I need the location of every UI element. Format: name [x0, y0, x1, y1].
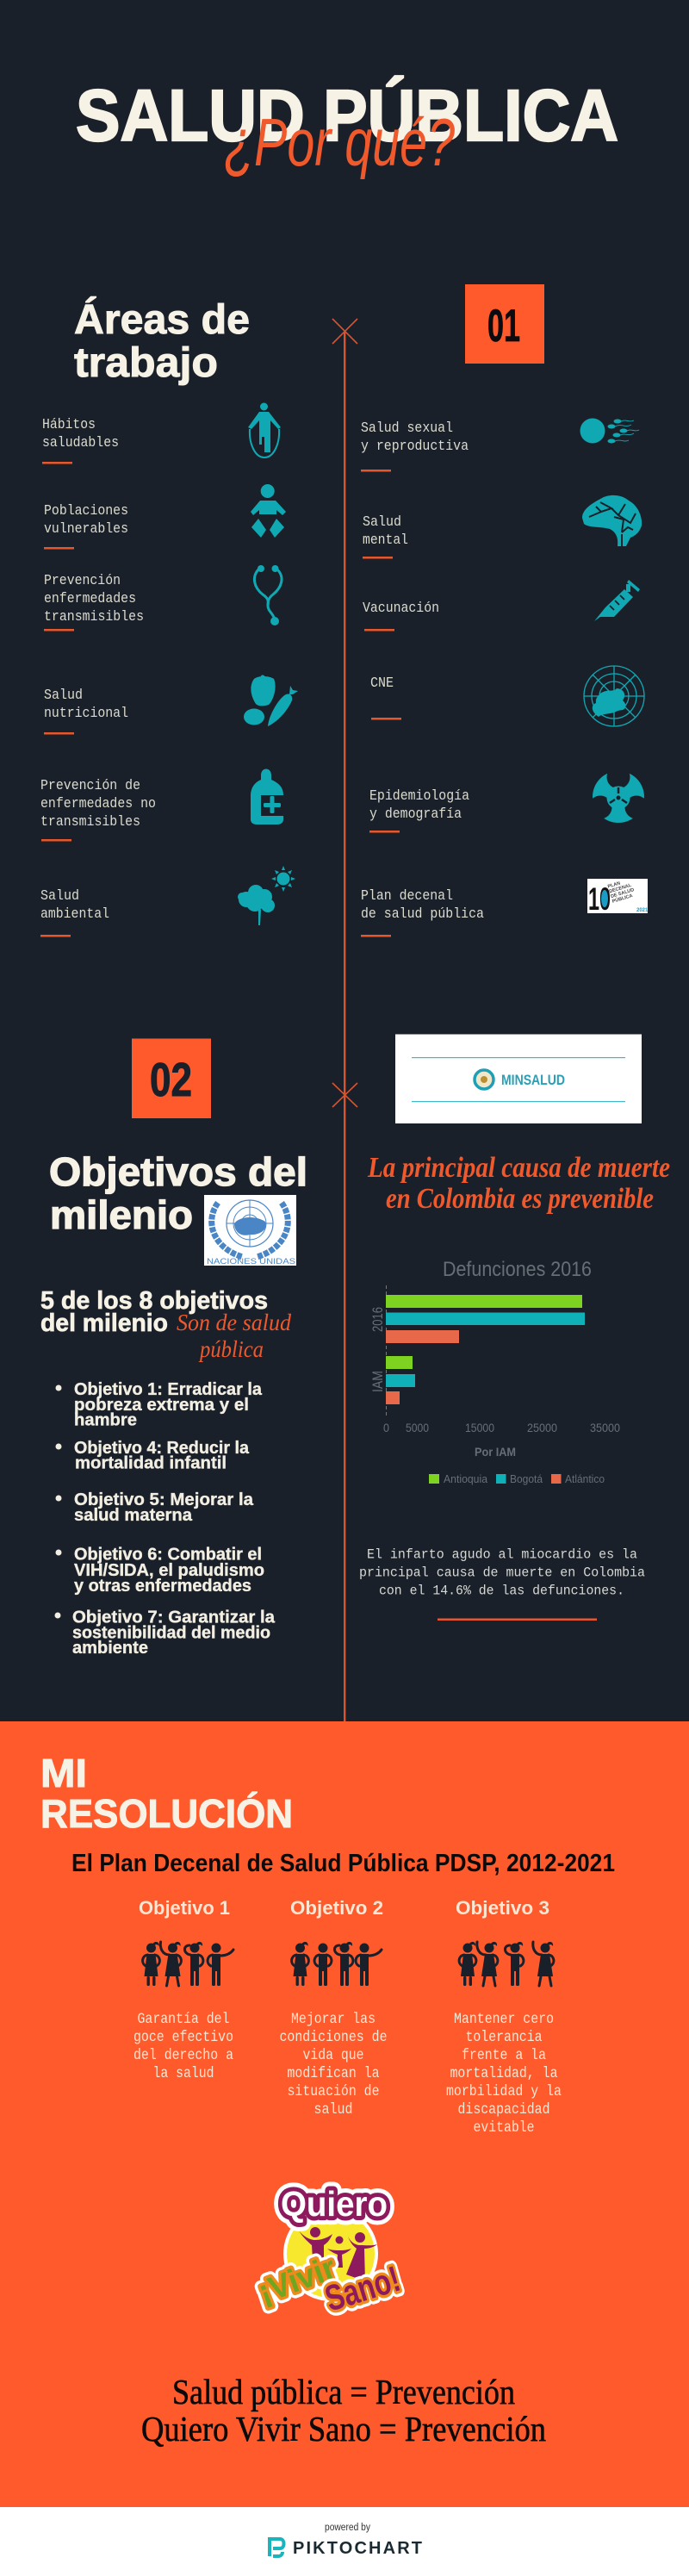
logo: quiero vivir sano: ¡Vivir [254, 2249, 341, 2311]
logo: quiero vivir sano: Quiero [281, 2184, 388, 2224]
column: objetivo 2: modifican la [288, 2065, 379, 2082]
logo: quiero vivir sano: ¡Vivir [254, 2249, 341, 2311]
item: enfermedades transmisibles: transmisibles [44, 608, 144, 625]
item: poblaciones vulnerables: Poblaciones [44, 502, 128, 519]
column: objetivo 1: Garantía del [138, 2011, 229, 2028]
item: enfermedades transmisibles: Prevención [44, 572, 121, 588]
objective 6 [55, 1546, 264, 1596]
icon: baby [251, 484, 286, 538]
item: epidemiologia [369, 787, 469, 832]
legend: Antioquia [444, 1472, 488, 1485]
objective 6: y otras enfermedades [74, 1577, 251, 1596]
x axis title: Por IAM [475, 1445, 516, 1459]
script note: son de salud publica [177, 1310, 291, 1362]
heading: areas de trabajo: Áreas de [74, 296, 250, 343]
text block: infarto agudo [359, 1547, 645, 1599]
column: objetivo 1: goce efectivo [133, 2029, 233, 2046]
subtitle: ¿Por qué? [224, 104, 455, 180]
text block: infarto agudo: con el 14.6% de las defunciones. [379, 1584, 624, 1599]
heading: mi resolucion [40, 1751, 293, 1836]
subheading: 5 de los 8 objetivos: del milenio [40, 1310, 168, 1337]
list: left column areas [40, 416, 156, 937]
objective 1: Objetivo 1: Erradicar la [74, 1380, 263, 1399]
column: objetivo 3: Objetivo 3 [456, 1897, 549, 1919]
heading: objetivos del milenio: Objetivos del [49, 1149, 307, 1194]
item: salud sexual [361, 420, 469, 472]
x axis labels: 35000 [590, 1421, 620, 1434]
logo: quiero vivir sano: Sano! [320, 2258, 405, 2319]
item: salud mental: Salud [363, 513, 401, 530]
objective 4: mortalidad infantil [75, 1454, 227, 1473]
item: enfermedades no transmisibles: enfermedades no [40, 795, 156, 812]
objective 5: salud materna [74, 1506, 193, 1525]
chart title: Defunciones 2016 [443, 1258, 592, 1281]
icon: medicine bottle [251, 768, 283, 824]
item: epidemiologia: y demografía [369, 806, 462, 822]
bars [386, 1295, 585, 1404]
column: objetivo 3 [446, 1897, 562, 2137]
item: enfermedades no transmisibles [40, 777, 156, 841]
legend: Atlántico [565, 1472, 605, 1485]
item: plan decenal [361, 887, 484, 937]
objective 5: Objetivo 5: Mejorar la [74, 1490, 254, 1509]
item: salud mental: mental [363, 532, 408, 548]
legend: Bogotá [510, 1472, 543, 1485]
item: poblaciones vulnerables: vulnerables [44, 520, 128, 537]
item: salud mental [363, 513, 408, 558]
item: salud nutricional: nutricional [44, 705, 128, 721]
y axis labels: 2016 [369, 1307, 386, 1332]
objective 4 [55, 1439, 250, 1473]
item: salud sexual: Salud sexual [361, 420, 453, 436]
item: CNE: CNE [370, 675, 394, 691]
objective 1 [55, 1380, 263, 1430]
objective 1: pobreza extrema y el [74, 1396, 249, 1415]
item: salud sexual: y reproductiva [361, 438, 469, 454]
x axis labels: 25000 [527, 1421, 557, 1434]
icon: egg and sperm [580, 419, 639, 443]
item: epidemiologia: Epidemiología [369, 787, 469, 804]
item: CNE [370, 675, 401, 720]
column: objetivo 2: salud [313, 2101, 353, 2119]
objective 5 [55, 1490, 254, 1525]
icon: tree and sun [238, 866, 295, 925]
logo: quiero vivir sano: Sano! [320, 2258, 405, 2319]
objective 7: sostenibilidad del medio [72, 1623, 270, 1642]
item: habitos saludables: Hábitos [42, 416, 96, 432]
x axis labels [383, 1421, 620, 1434]
logo: quiero vivir sano: Quiero [281, 2184, 388, 2224]
bar chart: defunciones 2016 [369, 1258, 620, 1485]
logo: quiero vivir sano: ¡Vivir [254, 2249, 341, 2311]
badge 02: 02 [150, 1053, 192, 1106]
logo: quiero vivir sano: Sano! [320, 2258, 405, 2319]
logo: naciones unidas: NACIONES UNIDAS [207, 1257, 295, 1266]
logo: plan decenal: DECENAL [609, 883, 632, 894]
logo: plan decenal: DE SALUD [610, 887, 635, 899]
column: objetivo 2: Objetivo 2 [290, 1897, 383, 1919]
objective 7: ambiente [72, 1639, 148, 1658]
item: enfermedades no transmisibles: Prevención de [40, 777, 140, 793]
logo: quiero vivir sano: Quiero [281, 2184, 388, 2224]
central timeline line [332, 319, 357, 1721]
heading: areas de trabajo: trabajo [74, 340, 218, 386]
icon: vegetables [244, 675, 298, 726]
logo: plan decenal: 2021 [636, 908, 649, 913]
chart axis [386, 1285, 388, 1417]
background: dark section [0, 0, 689, 1721]
column: objetivo 3: frente a la [462, 2047, 546, 2064]
text block: infarto agudo: principal causa de muerte en Colombia [359, 1565, 645, 1580]
legend [429, 1472, 605, 1485]
footer: piktochart: PIKTOCHART [293, 2539, 422, 2558]
logo: naciones unidas [204, 1195, 296, 1266]
subheading: 5 de los 8 objetivos [40, 1287, 268, 1337]
x axis labels: 15000 [465, 1421, 494, 1434]
closing statements [141, 2372, 546, 2448]
item: habitos saludables: saludables [42, 434, 119, 451]
closing statements: Salud pública = Prevención [172, 2372, 515, 2411]
objective 1: hambre [74, 1411, 137, 1430]
item: salud ambiental: Salud [40, 887, 79, 904]
item: salud ambiental [40, 887, 109, 937]
y axis labels: IAM [369, 1371, 386, 1392]
column: objetivo 2: condiciones de [279, 2029, 388, 2046]
script note: son de salud publica: Son de salud [177, 1310, 291, 1335]
logo: quiero vivir sano [254, 2184, 405, 2319]
column: objetivo 1: Objetivo 1 [139, 1897, 230, 1919]
objective 7 [55, 1608, 276, 1658]
icon: people group 1 [143, 1942, 233, 1986]
subheading: plan decenal: El Plan Decenal de Salud Pública PDSP, 2012-2021 [71, 1850, 615, 1877]
badge 01 [465, 284, 544, 364]
column: objetivo 1 [133, 1897, 233, 2082]
column: objetivo 3: morbilidad y la [446, 2083, 562, 2100]
column: objetivo 3: tolerancia [465, 2029, 543, 2046]
column: objetivo 2: vida que [303, 2047, 363, 2064]
closing statements: Quiero Vivir Sano = Prevención [141, 2409, 546, 2448]
item: plan decenal: de salud pública [361, 905, 484, 922]
objective 6: VIH/SIDA, el paludismo [74, 1561, 264, 1580]
item: plan decenal: Plan decenal [361, 887, 453, 904]
item: enfermedades transmisibles [44, 572, 144, 631]
column: objetivo 3: Mantener cero [454, 2011, 554, 2028]
badge 02 [132, 1039, 211, 1118]
item: salud nutricional: Salud [44, 687, 83, 703]
heading: mi resolucion: RESOLUCIÓN [40, 1791, 293, 1836]
footer: piktochart [0, 2507, 689, 2576]
heading: objetivos del milenio [49, 1149, 307, 1237]
icon: people group 2 [292, 1942, 382, 1986]
heading: areas de trabajo [74, 296, 250, 386]
column: objetivo 1: del derecho a [133, 2047, 233, 2064]
title: SALUD PÚBLICA [76, 75, 618, 156]
script note: son de salud publica: pública [198, 1336, 264, 1362]
item: enfermedades no transmisibles: transmisibles [40, 813, 140, 830]
logo: plan decenal: PLAN [607, 881, 621, 890]
x axis labels: 5000 [406, 1421, 429, 1434]
list: objetivos [55, 1380, 276, 1658]
subheading: 5 de los 8 objetivos: 5 de los 8 objetivos [40, 1287, 268, 1315]
item: salud nutricional [44, 687, 128, 734]
icon: brain [582, 495, 642, 546]
divider rule [438, 1618, 597, 1621]
logo: minsalud: MINSALUD [501, 1072, 565, 1088]
icon: biohazard [586, 765, 651, 823]
logo: plan decenal [587, 878, 649, 917]
column: objetivo 3: mortalidad, la [450, 2065, 558, 2082]
objective 7: Objetivo 7: Garantizar la [72, 1608, 276, 1627]
logo: plan decenal: PÚBLICA [611, 893, 633, 905]
text block: infarto agudo: El infarto agudo al miocardio es la [367, 1547, 637, 1563]
panel: mi resolucion [0, 1721, 689, 2507]
column: objetivo 3: evitable [474, 2119, 534, 2137]
badge 01: 01 [487, 301, 520, 352]
icon: jump rope [248, 403, 281, 457]
icon: people group 3 [459, 1942, 554, 1986]
column: objetivo 2: Mejorar las [291, 2011, 376, 2028]
item: salud ambiental: ambiental [40, 905, 109, 922]
heading: objetivos del milenio: milenio [50, 1192, 193, 1237]
list: right column areas [361, 420, 484, 937]
objective 4: Objetivo 4: Reducir la [74, 1439, 250, 1458]
icon: stethoscope [254, 565, 282, 625]
icon: syringe [594, 580, 640, 621]
item: enfermedades transmisibles: enfermedades [44, 590, 136, 607]
y axis labels [369, 1307, 386, 1392]
logo: minsalud [395, 1034, 642, 1123]
objective 6: Objetivo 6: Combatir el [74, 1546, 262, 1565]
item: vacunacion [363, 600, 439, 631]
column: objetivo 3: discapacidad [458, 2101, 549, 2119]
x axis labels: 0 [383, 1421, 389, 1434]
item: habitos saludables [42, 416, 119, 464]
icon: un world map [584, 666, 644, 726]
icon: piktochart logo [270, 2539, 284, 2556]
column: objetivo 2: situación de [288, 2083, 379, 2100]
footer: piktochart: powered by [325, 2523, 370, 2533]
script heading: principal causa de muerte [367, 1152, 670, 1215]
item: vacunacion: Vacunación [363, 600, 439, 616]
column: objetivo 1: la salud [153, 2065, 214, 2082]
heading: mi resolucion: MI [40, 1751, 87, 1795]
item: poblaciones vulnerables [44, 502, 128, 550]
logo: plan decenal: 10 [588, 881, 611, 917]
column: objetivo 2 [279, 1897, 388, 2119]
